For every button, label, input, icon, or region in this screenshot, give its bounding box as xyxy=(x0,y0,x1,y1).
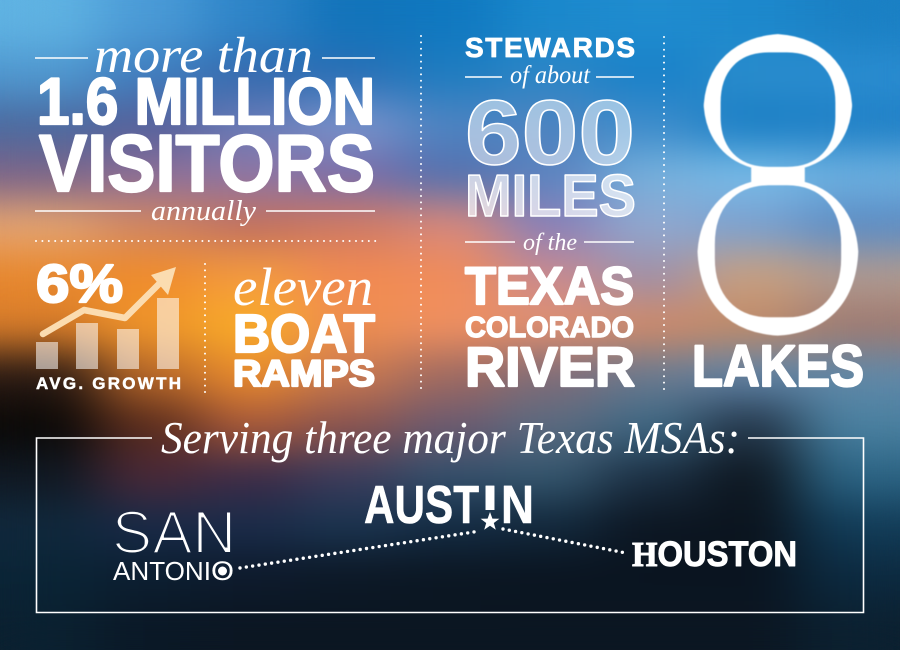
heading: ramps: RAMPS xyxy=(233,353,375,394)
city: Austin: N xyxy=(501,475,534,535)
heading: stewards: STEWARDS xyxy=(465,32,635,63)
text: of about: of about xyxy=(510,62,591,89)
text: of the: of the xyxy=(523,230,577,256)
panel: serving three MSAs xyxy=(36,412,864,612)
stat: 6%: 6% xyxy=(36,254,123,314)
icon: growth arrow xyxy=(43,267,176,334)
city: Austin: AUST xyxy=(364,475,479,535)
heading: river: RIVER xyxy=(465,335,635,398)
heading: serving three major Texas MSAs: Serving three major Texas MSAs: xyxy=(161,412,740,463)
icon: star xyxy=(481,512,499,530)
heading: colorado: COLORADO xyxy=(465,312,634,344)
bar chart xyxy=(36,298,179,369)
label: avg growth: AVG. GROWTH xyxy=(36,374,181,393)
dotted route xyxy=(240,529,626,568)
heading: lakes: LAKES xyxy=(692,334,864,399)
city: Austin xyxy=(364,485,532,530)
panel: average growth xyxy=(36,254,181,393)
heading: boat: BOAT xyxy=(233,304,375,364)
city: San Antonio: SAN xyxy=(112,499,236,566)
panel: river stewards xyxy=(465,32,636,398)
panel: boat ramps xyxy=(233,257,375,394)
heading: visitors: VISITORS xyxy=(39,119,375,209)
panel: visitors xyxy=(35,28,375,227)
heading: 1.6 million: 1.6 MILLION xyxy=(37,64,375,138)
text: eleven: eleven xyxy=(233,257,373,317)
city: Austin: I xyxy=(482,475,498,535)
city: San Antonio: ANTONI xyxy=(113,556,211,586)
stat: 600 outlined: 600 xyxy=(465,82,635,184)
city: San Antonio: O xyxy=(211,556,234,586)
city: Houston: HOUSTON xyxy=(632,535,797,574)
heading: texas: TEXAS xyxy=(465,257,634,316)
text: annually: annually xyxy=(151,196,257,227)
heading: miles outlined: MILES xyxy=(465,163,636,229)
frame xyxy=(36,438,864,612)
text: more than: more than xyxy=(94,28,313,84)
panel: lakes xyxy=(664,0,892,436)
